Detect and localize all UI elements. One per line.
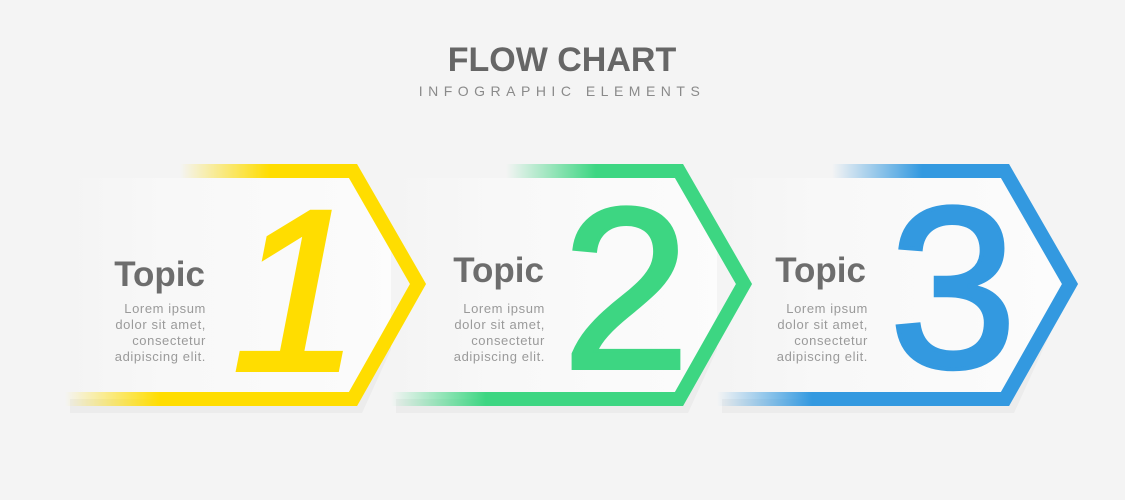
panel: step 2	[391, 160, 744, 417]
text block: adipiscing elit.	[454, 349, 545, 364]
heading: Topic: Topic	[114, 255, 205, 294]
text block: consectetur	[471, 333, 545, 348]
title: FLOW CHART	[448, 41, 676, 79]
text block: Lorem ipsum	[124, 301, 206, 316]
text block: adipiscing elit.	[777, 349, 868, 364]
text block: dolor sit amet,	[454, 317, 545, 332]
text block: Lorem ipsum	[463, 301, 545, 316]
text block: dolor sit amet,	[777, 317, 868, 332]
number 1: 1	[232, 162, 360, 419]
panel: step 3	[717, 159, 1070, 416]
text block: Lorem ipsum	[786, 301, 868, 316]
heading: Topic: Topic	[775, 251, 866, 290]
subtitle: INFOGRAPHIC ELEMENTS	[419, 83, 705, 99]
text block: consectetur	[132, 333, 206, 348]
number 2: 2	[562, 160, 690, 417]
text block: dolor sit amet,	[115, 317, 206, 332]
panel backgrounds	[65, 178, 1070, 413]
heading: Topic: Topic	[453, 251, 544, 290]
number 3: 3	[889, 159, 1017, 416]
text block: consectetur	[794, 333, 868, 348]
panel: step 1	[65, 162, 418, 419]
text block: adipiscing elit.	[115, 349, 206, 364]
